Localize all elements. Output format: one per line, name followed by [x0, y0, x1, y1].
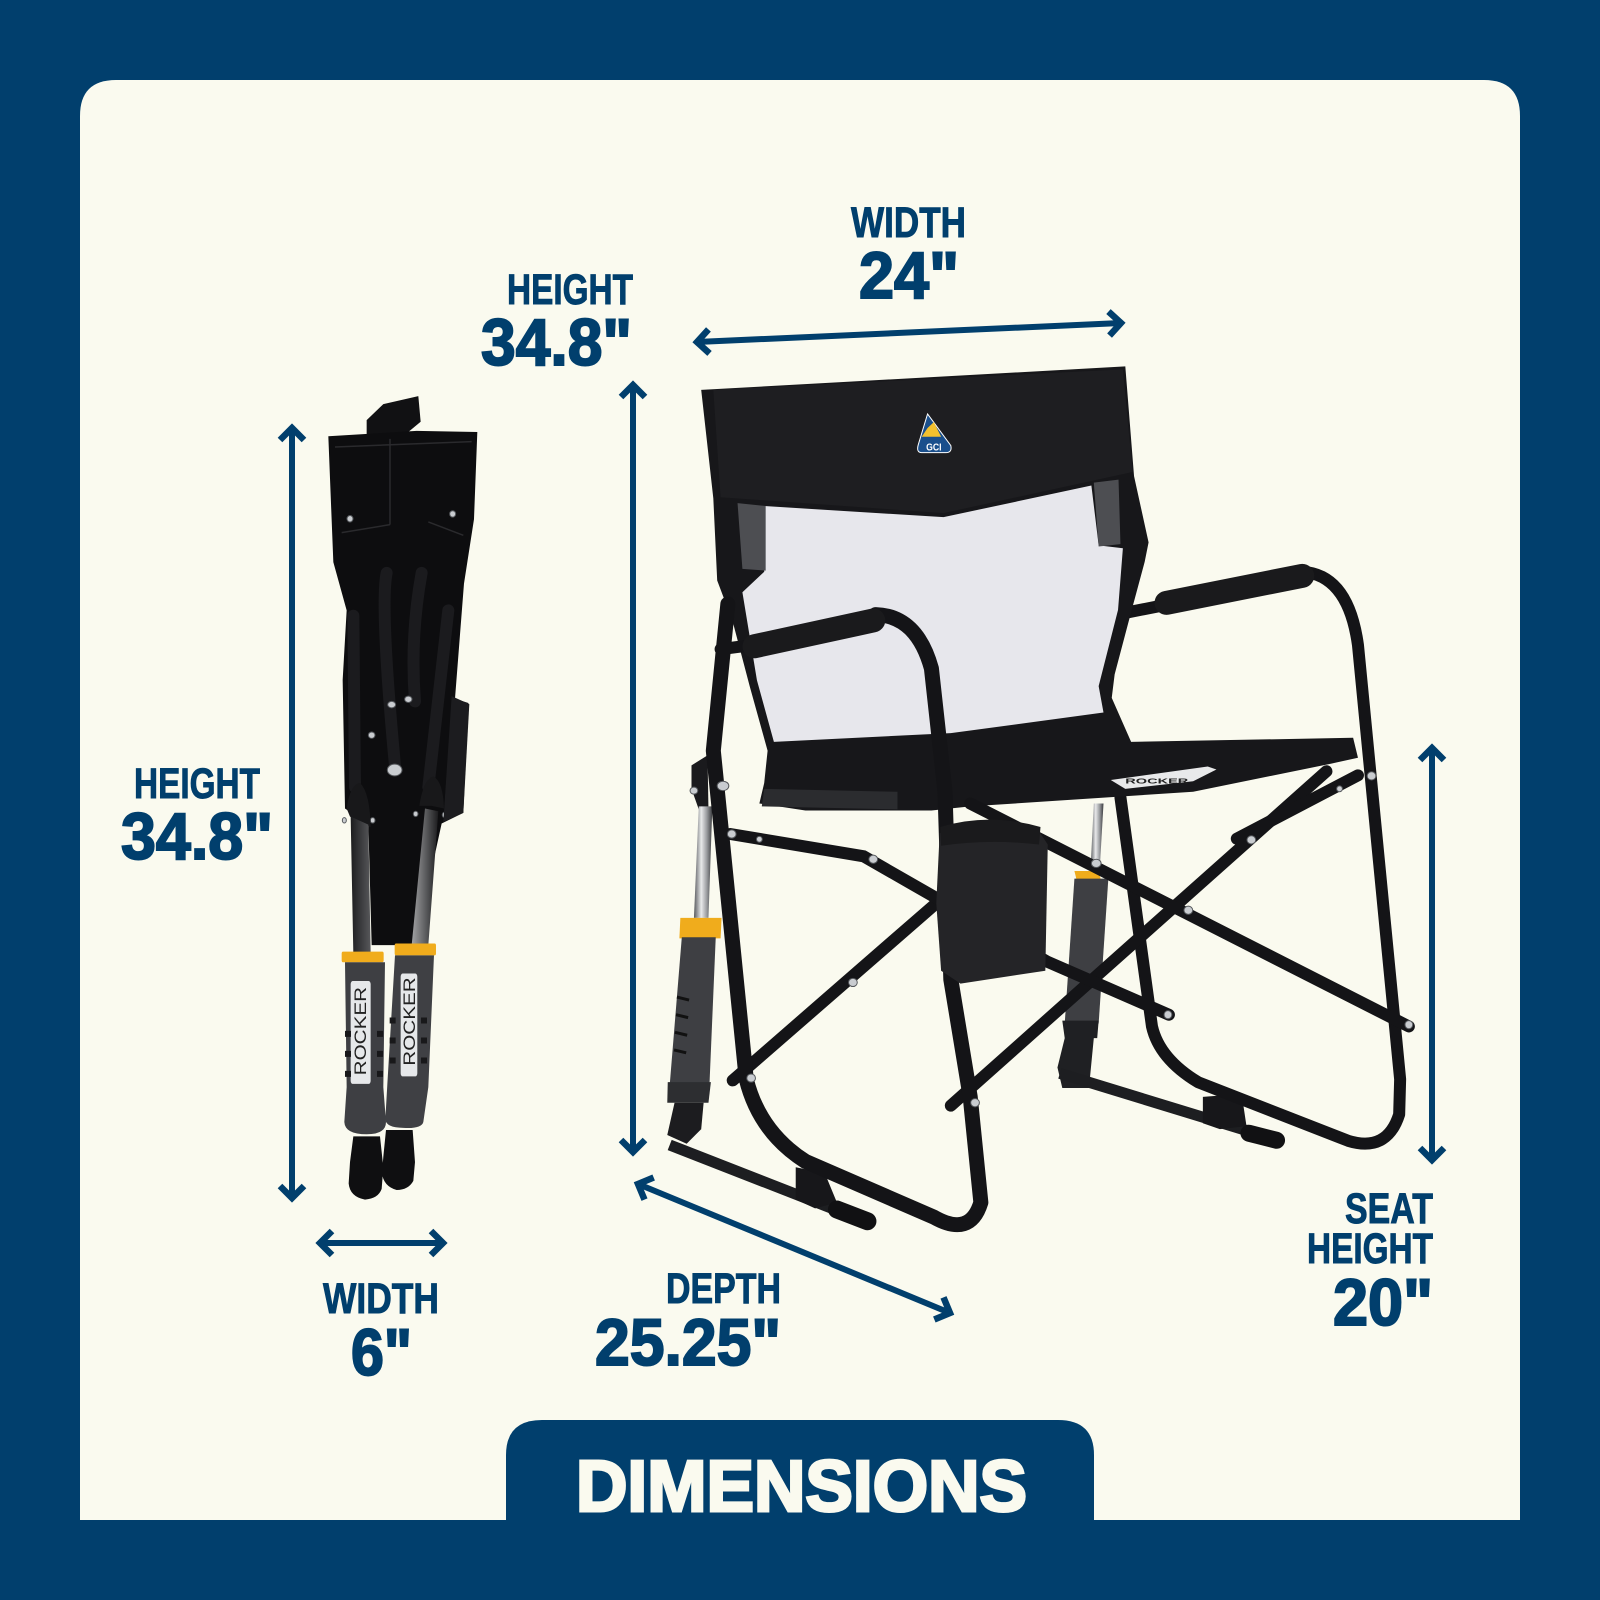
label: seat height: SEAT: [1345, 1185, 1433, 1233]
folded right shock: ROCKER: [400, 977, 419, 1066]
label: open width: WIDTH: [851, 199, 966, 247]
label: open height: HEIGHT: [507, 266, 633, 314]
label: open width: 24": [859, 238, 959, 312]
left frame tube: [713, 604, 981, 1225]
seat logo label: [1111, 767, 1216, 789]
seat logo label: ROCKER: [1125, 778, 1189, 786]
right arm pad: [1167, 576, 1302, 603]
rear foot bar: [1060, 1073, 1277, 1140]
folded tubes: [353, 573, 448, 787]
folded fabric body: [328, 431, 477, 945]
cross brace rear: [730, 834, 1169, 1015]
arrow: folded height: [289, 428, 295, 1198]
arrow: open height: [630, 385, 636, 1152]
label: seat height: [1307, 1185, 1433, 1339]
seat highlight: [762, 789, 898, 809]
label: folded width: WIDTH: [323, 1275, 439, 1323]
arrow: open width: [697, 323, 1121, 342]
folded chair photo: [328, 396, 477, 1200]
label: depth: 25.25": [595, 1305, 781, 1379]
label: seat height: HEIGHT: [1307, 1225, 1433, 1273]
folded right shock: [385, 944, 436, 1128]
brand badge: GCI: [926, 442, 942, 454]
label: folded width: 6": [351, 1315, 412, 1389]
title tab: [506, 1420, 1094, 1527]
folded left shock: [342, 952, 386, 1134]
label: folded height: 34.8": [121, 799, 273, 873]
arrow: folded width: [320, 1240, 443, 1246]
arrow: depth: [638, 1184, 950, 1313]
backrest rear tube: [1125, 605, 1164, 613]
left foot bar: [670, 1145, 867, 1221]
folded chrome rods: [351, 809, 438, 953]
label: folded height: [121, 760, 273, 873]
frame bolts: [690, 772, 1413, 1107]
label: folded height: HEIGHT: [134, 760, 260, 808]
cross brace front: [970, 803, 1409, 1026]
left arm bar: [721, 645, 752, 649]
label: seat height: 20": [1333, 1265, 1433, 1339]
label: folded width: [323, 1275, 439, 1389]
folded feet: [349, 1130, 415, 1200]
folded cup holder: [443, 696, 469, 822]
right rear frame: [1120, 572, 1400, 1144]
cup holder: [936, 820, 1048, 984]
open rocking chair photo: [667, 366, 1413, 1225]
title: dimensions: DIMENSIONS: [576, 1447, 1027, 1527]
label: depth: DEPTH: [666, 1265, 781, 1313]
label: depth: [595, 1265, 781, 1379]
rear rocker shock: [1057, 803, 1108, 1088]
cross brace lower left: [733, 903, 936, 1080]
label: open width: [851, 199, 966, 312]
backrest fabric lighter: [713, 369, 1133, 513]
folded pivot caps: [347, 776, 444, 827]
left arm pad: [755, 620, 873, 646]
arrow: seat height: [1429, 748, 1435, 1160]
backrest fabric body: [701, 366, 1358, 811]
mesh windows: [738, 480, 1120, 571]
label: open height: [481, 266, 633, 379]
brand badge: [918, 414, 951, 454]
folded bolts: [342, 511, 456, 823]
folded left shock: ROCKER: [351, 987, 370, 1075]
cross brace side: [1237, 775, 1358, 839]
folded fabric seams: [335, 439, 472, 535]
left shock absorber: [667, 755, 722, 1144]
label: open height: 34.8": [481, 305, 632, 379]
cross brace long: [951, 771, 1326, 1106]
folded top strap: [367, 396, 421, 439]
mesh back panel: [742, 486, 1123, 742]
